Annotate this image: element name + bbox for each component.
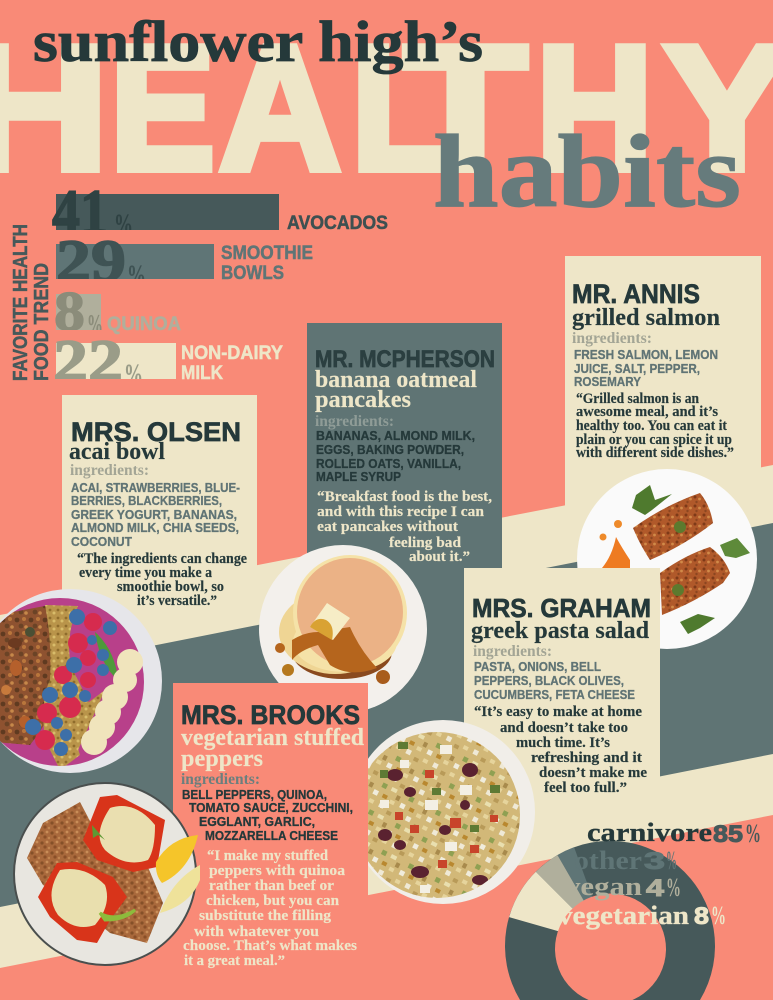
- panel: Mrs. Brooks: chicken, but you can: [206, 893, 339, 909]
- label: vegan 4%: vegan: [565, 872, 643, 901]
- panel: Mrs. Brooks: peppers: [181, 746, 263, 772]
- bar: smoothie bowls 29%: BOWLS: [221, 263, 284, 284]
- bar: avocados 41%: AVOCADOS: [287, 213, 388, 234]
- panel: Mr. Annis: ROSEMARY: [574, 374, 641, 389]
- label: other 3%: [574, 846, 677, 875]
- chart axis title: FOOD TREND: [31, 263, 53, 381]
- panel: Mrs. Graham: CUCUMBERS, FETA CHEESE: [474, 687, 635, 702]
- label: vegan 4%: 4: [646, 875, 665, 902]
- photo: pasta salad bowl: [351, 720, 535, 904]
- panel: Mr. McPherson: eat pancakes without: [317, 519, 458, 535]
- panel: Mrs. Brooks: peppers with quinoa: [209, 863, 345, 879]
- donut chart: diet breakdown: [505, 818, 761, 1000]
- big word HEALTHY: E: [110, 9, 215, 207]
- panel: Mrs. Brooks: MRS. BROOKS: [181, 700, 360, 730]
- panel: Mrs. Brooks: it a great meal.”: [184, 953, 285, 969]
- label: carnivore 85%: [587, 818, 761, 848]
- panel: Mrs. Brooks: ingredients:: [181, 771, 260, 788]
- panel: Mrs. Olsen: “The ingredients can change: [77, 551, 247, 567]
- panel: Mr. Annis: JUICE, SALT, PEPPER,: [574, 361, 700, 376]
- label: carnivore 85%: %: [745, 819, 761, 848]
- bar: smoothie bowls 29%: %: [127, 259, 146, 292]
- panel: Mrs. Brooks: choose. That’s what makes: [183, 938, 358, 954]
- photo: pancakes plate: [259, 545, 427, 713]
- bar: smoothie bowls 29%: [56, 240, 313, 280]
- panel: Mr. Annis: awesome meal, and it’s: [576, 404, 718, 420]
- panel: Mrs. Olsen: smoothie bowl, so: [117, 579, 224, 595]
- panel: Mr. Annis: FRESH SALMON, LEMON: [574, 347, 718, 362]
- panel: Mrs. Graham: feel too full.”: [544, 780, 627, 796]
- bar: quinoa 8%: 8: [54, 281, 85, 343]
- panel: Mrs. Graham: “It’s easy to make at home: [474, 704, 642, 720]
- panel: Mrs. Brooks: EGGLANT, GARLIC,: [199, 814, 315, 829]
- title: sunflower high's: sunflower high’s: [33, 9, 483, 74]
- bar: avocados 41%: [52, 190, 388, 230]
- panel: Mrs. Graham: PASTA, ONIONS, BELL: [474, 659, 601, 674]
- panel: Mr. McPherson: MR. MCPHERSON: [315, 346, 495, 373]
- bar: quinoa 8%: QUINOA: [107, 314, 181, 335]
- label: carnivore 85%: 85: [713, 821, 743, 848]
- photo: stuffed peppers plate: [14, 783, 200, 965]
- panel: Mr. McPherson: banana oatmeal: [315, 367, 477, 393]
- big word HEALTHY: A: [219, 9, 341, 207]
- label: other 3%: 3: [644, 848, 665, 875]
- donut chart: diet breakdown: %: [666, 846, 677, 875]
- slice: other 3%: [558, 847, 610, 946]
- panel: Mr. McPherson: MAPLE SYRUP: [316, 469, 401, 484]
- panel: Mrs. Olsen: acai bowl: [69, 439, 165, 465]
- title: habits: habits: [433, 114, 741, 229]
- panel: Mrs. Brooks: vegetarian stuffed: [181, 725, 365, 751]
- panel: Mrs. Graham: doesn’t make me: [539, 765, 647, 781]
- panel: Mrs. Olsen: ALMOND MILK, CHIA SEEDS,: [71, 520, 239, 535]
- label: vegan 4%: [565, 872, 681, 902]
- panel: Mrs. Brooks: BELL PEPPERS, QUINOA,: [182, 787, 327, 802]
- panel: Mrs. Brooks: TOMATO SAUCE, ZUCCHINI,: [189, 800, 353, 815]
- panel: Mrs. Olsen: [62, 395, 257, 620]
- chart axis title: FAVORITE HEALTH: [10, 224, 32, 381]
- big word HEALTHY: T: [404, 9, 527, 207]
- slice: vegetarian 8%: [509, 872, 610, 946]
- bar chart: favorite health food trend: [12, 190, 388, 380]
- panel: Mr. Annis: [565, 256, 761, 511]
- panel: Mr. Annis: ingredients:: [572, 330, 652, 347]
- panel: Mrs. Olsen: every time you make a: [79, 565, 212, 581]
- panel: Mrs. Olsen: GREEK YOGURT, BANANAS,: [71, 507, 237, 522]
- panel: Mrs. Olsen: ingredients:: [70, 462, 149, 479]
- chart axis title: [10, 224, 53, 381]
- panel: Mrs. Brooks: [173, 683, 368, 973]
- panel: Mr. Annis: “Grilled salmon is an: [576, 391, 699, 407]
- bar: smoothie bowls 29%: 29: [56, 228, 126, 294]
- bar: quinoa 8%: %: [87, 310, 103, 341]
- panel: Mrs. Graham: much time. It’s: [516, 735, 610, 751]
- bar: avocados 41%: 41: [52, 176, 108, 247]
- panel: Mr. Annis: MR. ANNIS: [572, 279, 700, 309]
- panel: Mrs. Olsen: it’s versatile.”: [137, 593, 217, 609]
- panel: Mr. McPherson: ingredients:: [315, 413, 394, 430]
- bar: quinoa 8%: [55, 292, 181, 334]
- panel: Mrs. Graham: and doesn’t take too: [500, 720, 628, 736]
- panel: Mrs. Olsen: BERRIES, BLACKBERRIES,: [71, 493, 222, 508]
- label: vegetarian 8%: [558, 901, 726, 930]
- panel: Mrs. Brooks: rather than beef or: [209, 878, 334, 894]
- panel: Mrs. Brooks: “I make my stuffed: [207, 848, 328, 864]
- big word HEALTHY: [0, 9, 773, 207]
- label: other 3%: other: [574, 846, 642, 875]
- panel: Mrs. Graham: refreshing and it: [531, 750, 642, 766]
- panel: Mrs. Olsen: MRS. OLSEN: [71, 417, 241, 447]
- big word HEALTHY: L: [351, 9, 451, 207]
- panel: Mrs. Olsen: COCONUT: [71, 534, 132, 549]
- panel: Mr. McPherson: EGGS, BAKING POWDER,: [316, 442, 464, 457]
- bar: non-dairy milk 22%: %: [124, 358, 143, 391]
- slice: vegan 4%: [536, 855, 610, 946]
- bar: non-dairy milk 22%: MILK: [181, 363, 223, 384]
- big word HEALTHY: H: [536, 9, 653, 207]
- label: vegan 4%: %: [666, 873, 681, 902]
- bar: non-dairy milk 22%: [55, 340, 283, 380]
- bar: avocados 41%: %: [114, 208, 133, 241]
- bar: non-dairy milk 22%: NON-DAIRY: [181, 343, 283, 364]
- panel: Mr. McPherson: “Breakfast food is the best,: [317, 489, 492, 505]
- panel: Mr. McPherson: feeling bad: [389, 535, 461, 551]
- panel: Mrs. Brooks: with whatever you: [194, 924, 319, 940]
- panel: Mr. McPherson: pancakes: [315, 387, 411, 413]
- panel: Mr. McPherson: BANANAS, ALMOND MILK,: [316, 428, 475, 443]
- panel: Mrs. Olsen: ACAI, STRAWBERRIES, BLUE-: [71, 480, 240, 495]
- panel: Mrs. Graham: MRS. GRAHAM: [472, 593, 651, 623]
- label: vegetarian 8%: %: [711, 901, 726, 930]
- label: carnivore 85%: carnivore: [587, 818, 712, 847]
- panel: Mrs. Brooks: MOZZARELLA CHEESE: [205, 828, 338, 843]
- photo: grilled salmon plate: [577, 469, 757, 649]
- panel: Mr. McPherson: about it.”: [409, 549, 470, 565]
- panel: Mr. Annis: grilled salmon: [572, 305, 720, 331]
- label: vegetarian 8%: 8: [694, 903, 709, 930]
- panel: Mrs. Graham: ingredients:: [473, 643, 552, 660]
- panel: Mrs. Graham: PEPPERS, BLACK OLIVES,: [474, 673, 624, 688]
- photo: acai bowl: [0, 589, 162, 773]
- bar: non-dairy milk 22%: 22: [53, 328, 123, 394]
- panel: Mrs. Graham: [464, 568, 660, 808]
- panel: Mrs. Brooks: substitute the filling: [199, 908, 331, 924]
- panel: Mr. Annis: plain or you can spice it up: [576, 432, 732, 448]
- label: vegetarian 8%: vegetarian: [558, 901, 690, 930]
- panel: Mr. McPherson: and with this recipe I can: [317, 504, 484, 520]
- panel: Mr. McPherson: ROLLED OATS, VANILLA,: [316, 456, 461, 471]
- panel: Mrs. Graham: greek pasta salad: [471, 618, 650, 644]
- panel: Mr. Annis: with different side dishes.”: [576, 445, 734, 461]
- panel: Mr. McPherson: [307, 323, 502, 643]
- bar: smoothie bowls 29%: SMOOTHIE: [221, 243, 313, 264]
- panel: Mr. Annis: healthy too. You can eat it: [576, 418, 727, 434]
